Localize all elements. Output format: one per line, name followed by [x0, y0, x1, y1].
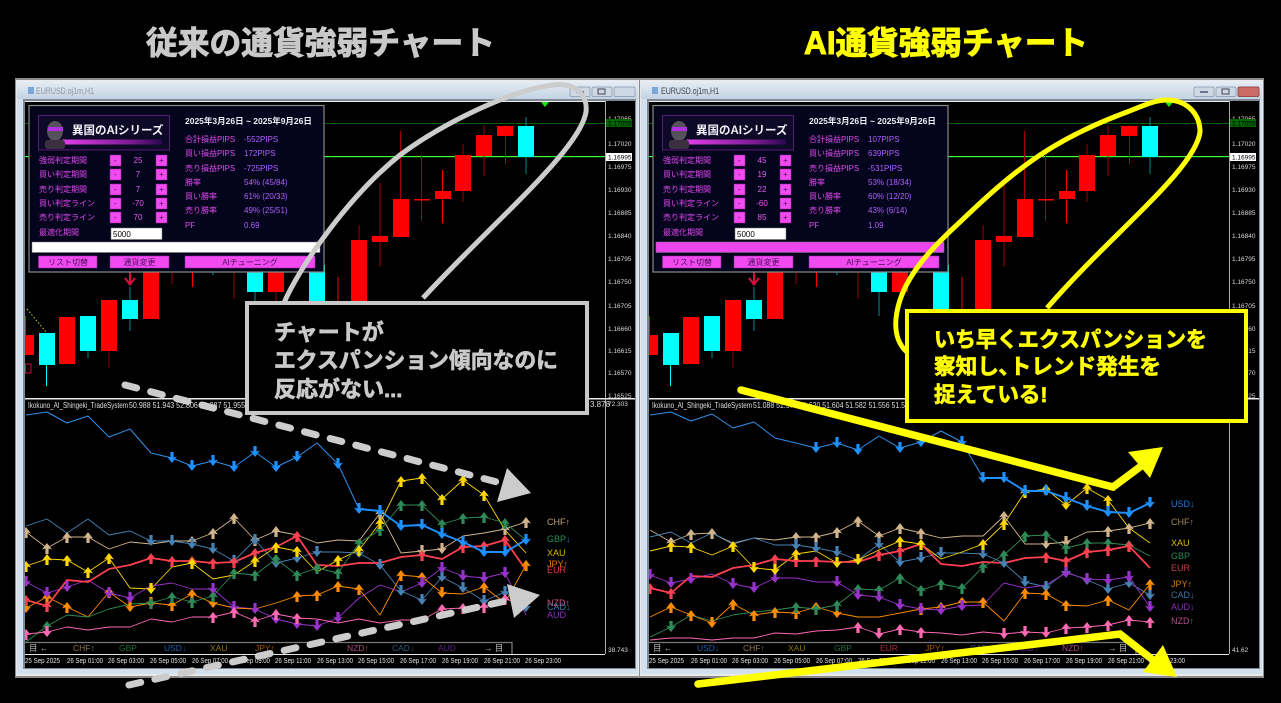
- parameter steppers: +: [783, 213, 788, 222]
- statistics: -725PIPS: [244, 164, 278, 173]
- signal arrows: [650, 442, 1150, 634]
- statistics: 43% (6/14): [868, 206, 907, 215]
- date axis: 26 Sep 13:00: [941, 656, 977, 665]
- legend bar: USD↓: [697, 643, 719, 653]
- indicator header: 3.878: [590, 400, 611, 409]
- price scale: conventional chart: 1.16930: [608, 187, 632, 194]
- date axis: 26 Sep 15:00: [358, 656, 394, 665]
- end labels: JPY↑: [1171, 579, 1192, 589]
- price scale: conventional chart: 1.16615: [608, 348, 632, 355]
- action buttons: リスト切替: [48, 257, 88, 267]
- callout: AI: 捉えている!: [934, 383, 1048, 407]
- legend bar: CAD↓: [392, 643, 414, 653]
- callout: conventional: [247, 303, 587, 413]
- statistics: PF: [185, 221, 195, 230]
- statistics: 売り勝率: [185, 205, 217, 215]
- end labels: NZD↑: [1171, 616, 1194, 626]
- legend bar: CAD↓: [970, 643, 992, 653]
- parameter steppers: -: [114, 185, 117, 194]
- control panel: conventional settings: [29, 106, 324, 272]
- close button: AI window: [1238, 87, 1259, 96]
- date axis: [649, 656, 1185, 665]
- parameter steppers: -: [738, 199, 741, 208]
- candlesticks: conventional chart: [25, 117, 534, 386]
- indicator pane: AI chart: [649, 401, 1249, 665]
- candlesticks: AI chart: [649, 117, 1158, 386]
- date axis: 26 Sep 07:00: [816, 656, 852, 665]
- legend bar: XAU: [210, 643, 227, 653]
- parameter steppers: -60: [756, 199, 768, 208]
- end labels: AUD: [547, 610, 567, 620]
- parameter steppers: 85: [758, 213, 767, 222]
- statistics: 53% (18/34): [868, 178, 912, 187]
- legend bar: → 目: [1108, 643, 1127, 653]
- parameter labels: 買い判定期間: [39, 169, 87, 179]
- end labels: [1171, 499, 1195, 626]
- indicator header: 41.62: [1232, 647, 1249, 654]
- optimisation period input: [735, 228, 786, 240]
- statistics: -552PIPS: [244, 135, 278, 144]
- end labels: CAD↓: [547, 602, 571, 612]
- currency lines: [26, 412, 526, 642]
- parameter labels: [663, 155, 719, 237]
- parameter labels: 買い判定ライン: [663, 198, 719, 208]
- window captions: [36, 86, 719, 96]
- price scale: conventional chart: 1.17065: [608, 116, 632, 123]
- progress bar: [656, 242, 944, 252]
- parameter steppers: -: [114, 213, 117, 222]
- statistics: 639PIPS: [868, 149, 900, 158]
- window: AI chart: [639, 78, 1264, 678]
- price scale: conventional chart: 1.17020: [608, 141, 632, 148]
- legend bar: USD↓: [164, 643, 186, 653]
- legend bar: JPY↑: [925, 643, 945, 653]
- date axis: 26 Sep 17:00: [400, 656, 436, 665]
- parameter steppers: +: [783, 156, 788, 165]
- signal arrows: [26, 452, 526, 634]
- price scale: conventional chart: 1.16660: [608, 326, 632, 333]
- logo banner: 異国のAIシリーズ: [696, 123, 788, 137]
- logo banner: 異国のAIシリーズ: [72, 123, 164, 137]
- parameter steppers: 22: [758, 185, 767, 194]
- legend bar: JPY↑: [255, 643, 275, 653]
- statistics: 売り損益PIPS: [809, 163, 859, 173]
- control panel: AI settings: [653, 106, 948, 272]
- end labels: GBP: [1171, 551, 1190, 561]
- statistics: 172PIPS: [244, 149, 276, 158]
- progress bar: [32, 242, 320, 252]
- optimisation period input: [111, 228, 162, 240]
- legend bar: [649, 642, 1136, 654]
- backtest period: 2025年3月26日 ~ 2025年9月26日: [185, 116, 312, 126]
- parameter labels: 売り判定ライン: [39, 212, 95, 222]
- end labels: [547, 517, 571, 620]
- parameter steppers: 45: [758, 156, 767, 165]
- indicator header: 51.088 51.574 51.620 51.604 51.582 51.556 51.5: [753, 401, 905, 410]
- date axis: 26 Sep 11:00: [899, 656, 935, 665]
- date axis: 26 Sep 23:00: [525, 656, 561, 665]
- indicator header: [652, 401, 1249, 654]
- statistics: 勝率: [185, 177, 201, 187]
- parameter steppers: +: [159, 156, 164, 165]
- parameter steppers: +: [159, 213, 164, 222]
- indicator header: Ikokuno_AI_Shingeki_TradeSystem: [28, 401, 128, 410]
- statistics: 49% (25/51): [244, 206, 288, 215]
- date axis: 26 Sep 09:00: [234, 656, 270, 665]
- parameter labels: 最適化期間: [39, 227, 79, 237]
- end labels: JPY↑: [547, 559, 568, 569]
- indicator pane: conventional chart: [25, 400, 628, 665]
- optimisation period input: 5000: [113, 230, 131, 239]
- date axis: 26 Sep 09:00: [858, 656, 894, 665]
- parameter steppers: -: [114, 156, 117, 165]
- statistics: [809, 134, 912, 230]
- callout: AI: いち早くエクスパンションを: [934, 328, 1207, 352]
- statistics: -531PIPS: [868, 164, 902, 173]
- date axis: 26 Sep 21:00: [1108, 656, 1144, 665]
- legend bar: 目 ←: [653, 643, 672, 653]
- parameter steppers: +: [783, 199, 788, 208]
- parameter steppers: -: [738, 156, 741, 165]
- date axis: 26 Sep 05:00: [774, 656, 810, 665]
- action buttons: 通貨変更: [748, 257, 780, 267]
- end labels: CAD↓: [1171, 590, 1195, 600]
- parameter steppers: [110, 155, 167, 223]
- legend bar: [25, 642, 512, 654]
- parameter steppers: [734, 155, 791, 223]
- legend bar: GBP: [834, 643, 852, 653]
- legend bar: XAU: [788, 643, 805, 653]
- statistics: 買い損益PIPS: [185, 148, 235, 158]
- parameter steppers: -: [114, 170, 117, 179]
- end labels: EUR: [1171, 563, 1191, 573]
- legend bar: NZD↑: [347, 643, 369, 653]
- date axis: 26 Sep 17:00: [1024, 656, 1060, 665]
- statistics: 54% (45/84): [244, 178, 288, 187]
- parameter labels: 売り判定期間: [663, 184, 711, 194]
- action buttons: [662, 256, 939, 268]
- logo banner: [38, 116, 170, 150]
- parameter steppers: -: [738, 185, 741, 194]
- indicator header: [28, 400, 628, 654]
- action buttons: AIチューニング: [846, 257, 902, 267]
- date axis: 26 Sep 01:00: [67, 656, 103, 665]
- date axis: 25 Sep 2025: [649, 656, 684, 665]
- end labels: XAU: [1171, 538, 1190, 548]
- statistics: 買い勝率: [185, 191, 217, 201]
- end labels: AUD↓: [1171, 602, 1195, 612]
- parameter steppers: +: [159, 199, 164, 208]
- legend bar: GBP: [119, 643, 137, 653]
- statistics: 61% (20/33): [244, 192, 288, 201]
- date axis: 26 Sep 03:00: [108, 656, 144, 665]
- price scale: conventional chart: 1.16525: [608, 393, 632, 400]
- parameter labels: [39, 155, 95, 237]
- parameter steppers: 7: [136, 185, 141, 194]
- price scale: conventional chart: 1.16705: [608, 303, 632, 310]
- callout: conventional: エクスパンション傾向なのに: [274, 348, 558, 373]
- statistics: 60% (12/20): [868, 192, 912, 201]
- parameter steppers: -: [738, 170, 741, 179]
- date axis: 26 Sep 13:00: [317, 656, 353, 665]
- parameter labels: 買い判定ライン: [39, 198, 95, 208]
- statistics: 売り損益PIPS: [185, 163, 235, 173]
- price scale: AI chart: [1230, 116, 1256, 400]
- arrow: conventional downward dashed upper: [125, 385, 531, 502]
- price scale: conventional chart: 1.16570: [608, 370, 632, 377]
- end labels: GBP↓: [547, 534, 571, 544]
- parameter steppers: 70: [134, 213, 143, 222]
- price scale: conventional chart: 1.16750: [608, 279, 632, 286]
- currency lines: [650, 412, 1150, 640]
- statistics: 売り勝率: [809, 205, 841, 215]
- parameter labels: 強弱判定期間: [663, 155, 711, 165]
- price scale: conventional chart: 1.16840: [608, 233, 632, 240]
- parameter steppers: +: [159, 185, 164, 194]
- title: AI chart: AI通貨強弱チャート: [804, 25, 1088, 61]
- callout: conventional: 反応がない...: [274, 377, 402, 402]
- end labels: CHF↑: [547, 517, 570, 527]
- parameter steppers: +: [783, 170, 788, 179]
- statistics: 合計損益PIPS: [185, 134, 235, 144]
- price scale: conventional chart: 1.16995: [608, 154, 632, 162]
- highlight ellipse: AI chart: [896, 100, 1200, 356]
- legend bar: NZD↑: [1062, 643, 1084, 653]
- date axis: 26 Sep 05:00: [150, 656, 186, 665]
- parameter labels: 売り判定期間: [39, 184, 87, 194]
- statistics: [185, 134, 288, 230]
- end labels: EUR: [547, 565, 567, 575]
- backtest period: 2025年3月26日 ~ 2025年9月26日: [809, 116, 936, 126]
- callout: AI: 察知し､トレンド発生を: [934, 355, 1161, 379]
- action buttons: 通貨変更: [124, 257, 156, 267]
- price scale: conventional chart: 1.16975: [608, 164, 632, 171]
- window captions: EURUSD.oj1m,H1: [36, 86, 94, 96]
- title: conventional chart: 従来の通貨強弱チャート: [146, 25, 495, 61]
- legend bar: CHF↑: [743, 643, 765, 653]
- legend bar: AUD↓: [1016, 643, 1038, 653]
- statistics: 勝率: [809, 177, 825, 187]
- parameter labels: 売り判定ライン: [663, 212, 719, 222]
- date axis: 26 Sep 19:00: [442, 656, 478, 665]
- date axis: 26 Sep 23:00: [1149, 656, 1185, 665]
- end labels: CHF↑: [1171, 517, 1194, 527]
- statistics: 107PIPS: [868, 135, 900, 144]
- statistics: PF: [809, 221, 819, 230]
- highlight ellipse: conventional chart: [283, 85, 586, 305]
- date axis: 26 Sep 19:00: [1066, 656, 1102, 665]
- indicator header: 50.988 51.943 52.806 51.987 51.955: [129, 401, 245, 410]
- statistics: 買い損益PIPS: [809, 148, 859, 158]
- sell arrow and signal markers: conventional chart: [26, 102, 549, 373]
- signal markers: AI chart: [749, 102, 1173, 284]
- window: conventional chart: [15, 78, 640, 678]
- end labels: NZD↑: [547, 598, 570, 608]
- price scale: conventional chart: 1.17059: [608, 120, 632, 128]
- optimisation period input: 5000: [737, 230, 755, 239]
- parameter labels: 買い判定期間: [663, 169, 711, 179]
- parameter labels: 強弱判定期間: [39, 155, 87, 165]
- arrow: AI lower yellow: [698, 634, 1177, 684]
- callout: AI: [907, 311, 1246, 421]
- parameter steppers: +: [159, 170, 164, 179]
- date axis: 26 Sep 01:00: [691, 656, 727, 665]
- end labels: XAU: [547, 548, 566, 558]
- parameter steppers: 7: [136, 170, 141, 179]
- parameter steppers: -70: [132, 199, 144, 208]
- statistics: 1.09: [868, 221, 884, 230]
- price scale: conventional chart: [606, 116, 632, 400]
- indicator header: Ikokuno_AI_Shingeki_TradeSystem: [652, 401, 752, 410]
- date axis: 25 Sep 2025: [25, 656, 60, 665]
- arrow: conventional upward dashed lower: [129, 584, 540, 685]
- date axis: 26 Sep 03:00: [732, 656, 768, 665]
- parameter steppers: -: [738, 213, 741, 222]
- date axis: 26 Sep 15:00: [982, 656, 1018, 665]
- parameter labels: 最適化期間: [663, 227, 703, 237]
- statistics: 合計損益PIPS: [809, 134, 859, 144]
- window captions: EURUSD.oj1m,H1: [661, 86, 719, 96]
- logo banner: [662, 116, 794, 150]
- statistics: 0.69: [244, 221, 260, 230]
- statistics: 買い勝率: [809, 191, 841, 201]
- end labels: USD↓: [1171, 499, 1195, 509]
- date axis: 26 Sep 21:00: [484, 656, 520, 665]
- price scale: conventional chart: 1.16795: [608, 256, 632, 263]
- arrow: AI upper yellow: [741, 390, 1163, 487]
- indicator header: 38.743: [608, 647, 628, 654]
- action buttons: リスト切替: [672, 257, 712, 267]
- legend bar: CHF↑: [73, 643, 95, 653]
- indicator header: 72.303: [608, 401, 628, 408]
- parameter steppers: 19: [758, 170, 767, 179]
- legend bar: EUR: [880, 643, 898, 653]
- date axis: [25, 656, 561, 665]
- legend bar: → 目: [484, 643, 503, 653]
- date axis: 26 Sep 11:00: [275, 656, 311, 665]
- price scale: conventional chart: 1.16885: [608, 210, 632, 217]
- action buttons: AIチューニング: [222, 257, 278, 267]
- legend bar: 目 ←: [29, 643, 48, 653]
- callout: conventional: チャートが: [274, 320, 384, 345]
- legend bar: AUD: [438, 643, 456, 653]
- parameter steppers: +: [783, 185, 788, 194]
- action buttons: [38, 256, 315, 268]
- parameter steppers: -: [114, 199, 117, 208]
- date axis: 26 Sep 07:00: [192, 656, 228, 665]
- parameter steppers: 25: [134, 156, 143, 165]
